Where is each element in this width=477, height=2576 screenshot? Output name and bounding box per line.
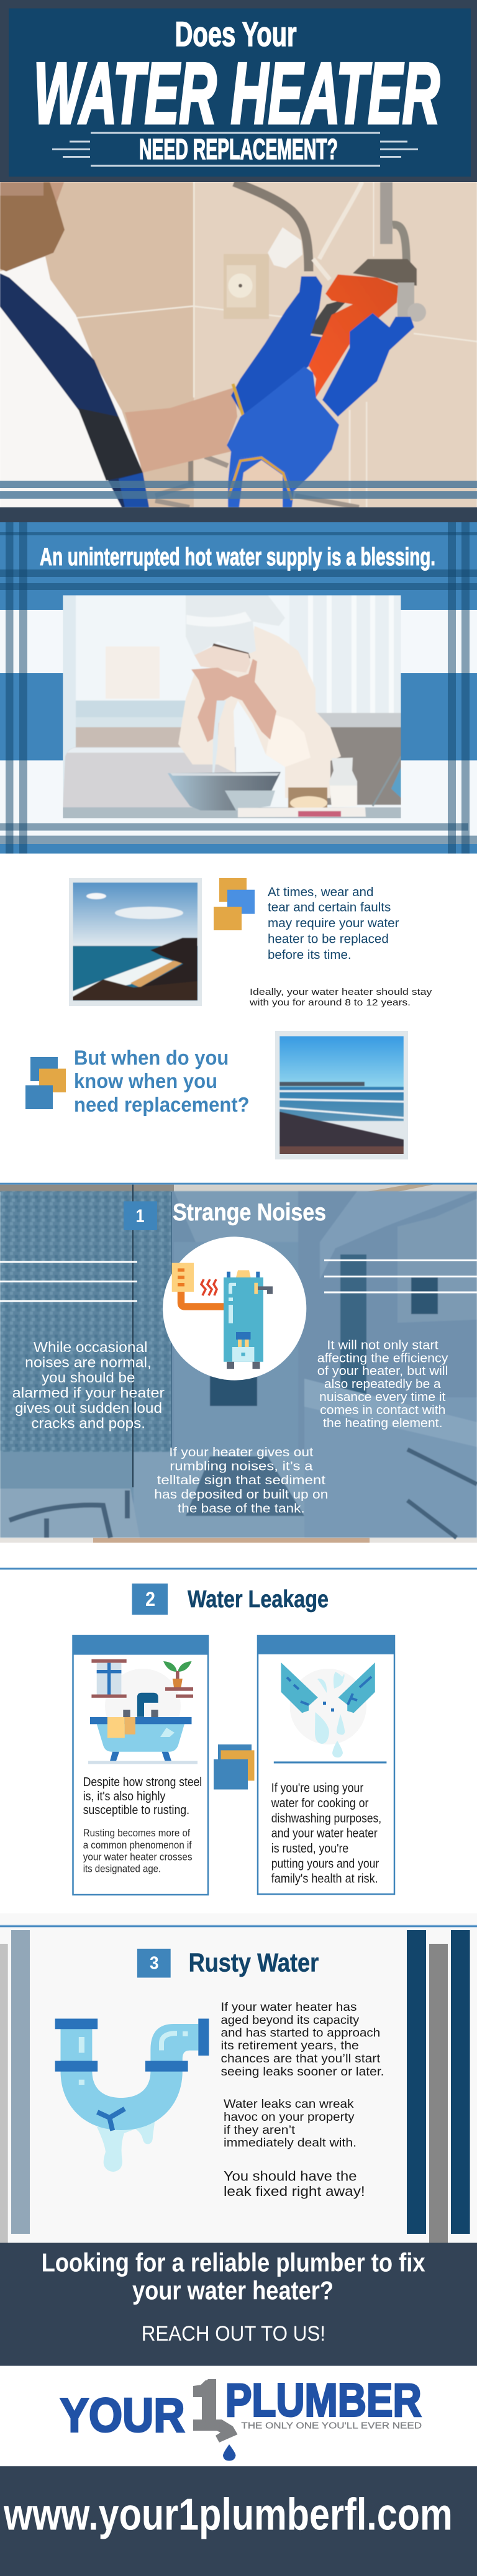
text: rusting phenomenon: your water heater crosses <box>83 1852 193 1863</box>
icon: water heater in circle <box>163 1236 306 1381</box>
valve <box>353 259 417 286</box>
text: fix right away <box>224 2168 365 2199</box>
number badge 2 <box>132 1584 168 1615</box>
text: occasional noises: While occasional <box>34 1339 148 1355</box>
text: efficiency: the heating element. <box>323 1417 442 1430</box>
text: occasional noises: cracks and pops. <box>31 1415 145 1431</box>
card: steel rusting <box>72 1635 209 1895</box>
decorative lines <box>0 1259 477 1302</box>
text: water leaks havoc: Water leaks can wreak <box>224 2098 354 2111</box>
text: occasional noises: noises are normal, <box>25 1354 152 1371</box>
photo: coastline <box>69 878 202 1006</box>
text: ideally: with you for around 8 to 12 years. <box>249 997 411 1008</box>
upper glove <box>231 276 327 417</box>
text: efficiency: It will not only start <box>327 1339 438 1353</box>
card: health risk <box>257 1635 395 1894</box>
text: water leaks havoc <box>224 2098 357 2150</box>
logo tagline: THE ONLY ONE YOU'LL EVER NEED <box>241 2420 422 2431</box>
text: cooking and health: putting yours and your <box>271 1857 379 1871</box>
text: aged beyond capacity: and has started to approach <box>221 2027 380 2040</box>
subtitle: need replacement: NEED REPLACEMENT? <box>139 133 338 165</box>
icon: leaking u-pipe <box>55 2018 209 2172</box>
text: efficiency: nuisance every time it <box>319 1390 446 1404</box>
forearm through cuff <box>239 460 292 507</box>
text: aged beyond capacity: its retirement years, the <box>221 2039 359 2052</box>
text: fix right away: You should have the <box>224 2168 357 2184</box>
hair and face <box>211 643 250 658</box>
text: rumbling noises: the base of the tank. <box>178 1501 305 1515</box>
text: wear and tear: may require your water <box>268 916 399 930</box>
text: efficiency: comes in contact with <box>320 1404 445 1417</box>
icon: leaking broken pipe <box>274 1662 386 1764</box>
text: efficiency: of your heater, but will <box>317 1364 448 1378</box>
text: water leaks havoc: if they aren’t <box>224 2124 296 2137</box>
text: aged beyond capacity: chances are that you’ll start <box>221 2052 381 2066</box>
text: aged beyond capacity: seeing leaks sooner or later. <box>221 2066 384 2079</box>
text: despite steel: Despite how strong steel <box>83 1776 202 1789</box>
photo stripes <box>0 481 477 499</box>
text: water leaks havoc: havoc on your property <box>224 2111 355 2124</box>
number badge 3: 3 <box>150 1954 159 1974</box>
number badge 3 <box>137 1949 171 1977</box>
heading: but when do you know: need replacement? <box>74 1093 250 1116</box>
heading: strange noises: Strange Noises <box>173 1199 326 1226</box>
heading: looking for plumber: Looking for a reliable plumber to fix <box>42 2248 425 2277</box>
text: aged beyond capacity: If your water heater has <box>221 2001 357 2014</box>
text: occasional noises: gives out sudden loud <box>15 1400 162 1416</box>
text: cooking and health: and your water heater <box>271 1827 378 1841</box>
photo: woman washing face <box>63 595 401 819</box>
text: efficiency: affecting the efficiency <box>317 1351 448 1365</box>
shirt <box>0 256 149 507</box>
text: ideally: Ideally, your water heater should stay <box>250 987 432 997</box>
number badge 2: 2 <box>145 1588 155 1610</box>
text: cooking and health: If you're using your <box>271 1781 363 1795</box>
towel rail <box>155 456 359 507</box>
text: rusting phenomenon: Rusting becomes more of <box>83 1828 190 1839</box>
text: occasional noises: you should be <box>42 1369 135 1386</box>
text: cooking and health: water for cooking or <box>271 1797 369 1810</box>
text: reach out: REACH OUT TO US! <box>142 2322 325 2346</box>
rule above section 1 <box>0 1183 477 1185</box>
panel: 2 water leakage <box>72 1584 395 1895</box>
text: cooking and health: is rusted, you're <box>271 1842 348 1856</box>
number badge 1 <box>124 1201 157 1230</box>
cup and eggs <box>288 787 327 808</box>
subtitle rules <box>52 132 418 166</box>
panel: logo <box>0 2365 477 2466</box>
plug <box>268 227 302 268</box>
text: efficiency <box>317 1339 448 1430</box>
strap <box>0 273 149 507</box>
title: does your: Does Your <box>175 14 297 53</box>
heading: but when do you know: know when you <box>74 1069 217 1092</box>
icon: blue and orange squares <box>25 1057 66 1109</box>
photo: plumber fixing pipe with wrench <box>0 182 477 507</box>
panel: call to action <box>0 2243 477 2366</box>
right fingers <box>322 313 414 417</box>
text: water leaks havoc: immediately dealt with. <box>224 2137 357 2150</box>
socket <box>224 254 269 319</box>
logo word: your: YOUR <box>60 2389 185 2442</box>
rule above section 2 <box>0 1567 477 1570</box>
icon: bathtub <box>88 1659 198 1764</box>
panel: title header <box>0 0 477 182</box>
text: rumbling noises <box>154 1445 328 1515</box>
photo: bathroom background with blue overlay <box>0 1185 477 1543</box>
beard <box>0 182 65 271</box>
panel: website footer <box>0 2466 477 2576</box>
dark band under photo <box>0 507 477 522</box>
text: rumbling noises: rumbling noises, it’s a <box>170 1459 313 1474</box>
text: occasional noises <box>12 1339 165 1431</box>
heading: but when do you know <box>74 1046 250 1116</box>
panel: intro <box>25 878 432 1159</box>
text: wear and tear: heater to be replaced <box>268 932 389 946</box>
panel: blessing banner <box>0 522 477 853</box>
hoses <box>234 182 309 271</box>
text: rumbling noises: If your heater gives out <box>169 1445 314 1459</box>
lower glove <box>227 366 339 491</box>
heading: rusty water: Rusty Water <box>189 1948 319 1977</box>
icon: overlapping squares <box>214 1744 255 1790</box>
icon: orange and blue squares <box>214 878 255 930</box>
text: aged beyond capacity: aged beyond its capacity <box>221 2014 360 2027</box>
number badge 1: 1 <box>135 1206 144 1227</box>
robe <box>178 626 341 798</box>
text: wear and tear: tear and certain faults <box>268 900 391 914</box>
logo numeral with tap: 1 <box>194 2365 221 2447</box>
heading: looking for plumber <box>42 2248 425 2305</box>
text: wear and tear <box>268 885 399 962</box>
text: ideally <box>249 987 432 1008</box>
text: cooking and health: dishwashing purposes, <box>271 1812 381 1825</box>
panel: 1 strange noises <box>0 1184 477 1543</box>
jar <box>329 758 357 807</box>
text: rusting phenomenon: its designated age. <box>83 1864 161 1875</box>
cloth <box>238 807 366 817</box>
panel: 3 rusty water <box>0 1913 477 2243</box>
heading: looking for plumber: your water heater? <box>132 2275 334 2305</box>
text: wear and tear: before its time. <box>268 948 352 962</box>
glass dish <box>225 791 275 810</box>
text: despite steel: susceptible to rusting. <box>83 1803 189 1817</box>
text: occasional noises: alarmed if your heater <box>12 1385 165 1401</box>
text: cooking and health <box>271 1781 381 1886</box>
towel <box>186 595 285 656</box>
arm <box>125 388 237 473</box>
text: wear and tear: At times, wear and <box>268 885 373 899</box>
heading: water leakage: Water Leakage <box>188 1586 329 1613</box>
logo word: plumber: PLUMBER <box>225 2374 422 2426</box>
text: rusting phenomenon <box>83 1828 193 1875</box>
text: despite steel: is, it's also highly <box>83 1790 165 1803</box>
heading: but when do you know: But when do you <box>74 1046 229 1069</box>
wrench body <box>309 274 398 402</box>
hands and forearms <box>191 659 276 742</box>
text: fix right away: leak fixed right away! <box>224 2184 365 2199</box>
text: efficiency: also repeatedly be a <box>324 1377 441 1391</box>
photo: pier and sea <box>275 1031 408 1159</box>
wrench jaw <box>311 298 350 335</box>
text: cooking and health: family's health at risk. <box>271 1872 378 1886</box>
text: rumbling noises: telltale sign that sediment <box>157 1473 325 1487</box>
text: aged beyond capacity <box>221 2001 384 2079</box>
icon: water drop <box>223 2444 236 2460</box>
text: despite steel <box>83 1776 202 1817</box>
text: rumbling noises: has deposited or built up on <box>154 1487 328 1502</box>
text: rusting phenomenon: a common phenomenon if <box>83 1839 192 1851</box>
side bars <box>0 1930 470 2243</box>
bowl <box>168 772 281 810</box>
